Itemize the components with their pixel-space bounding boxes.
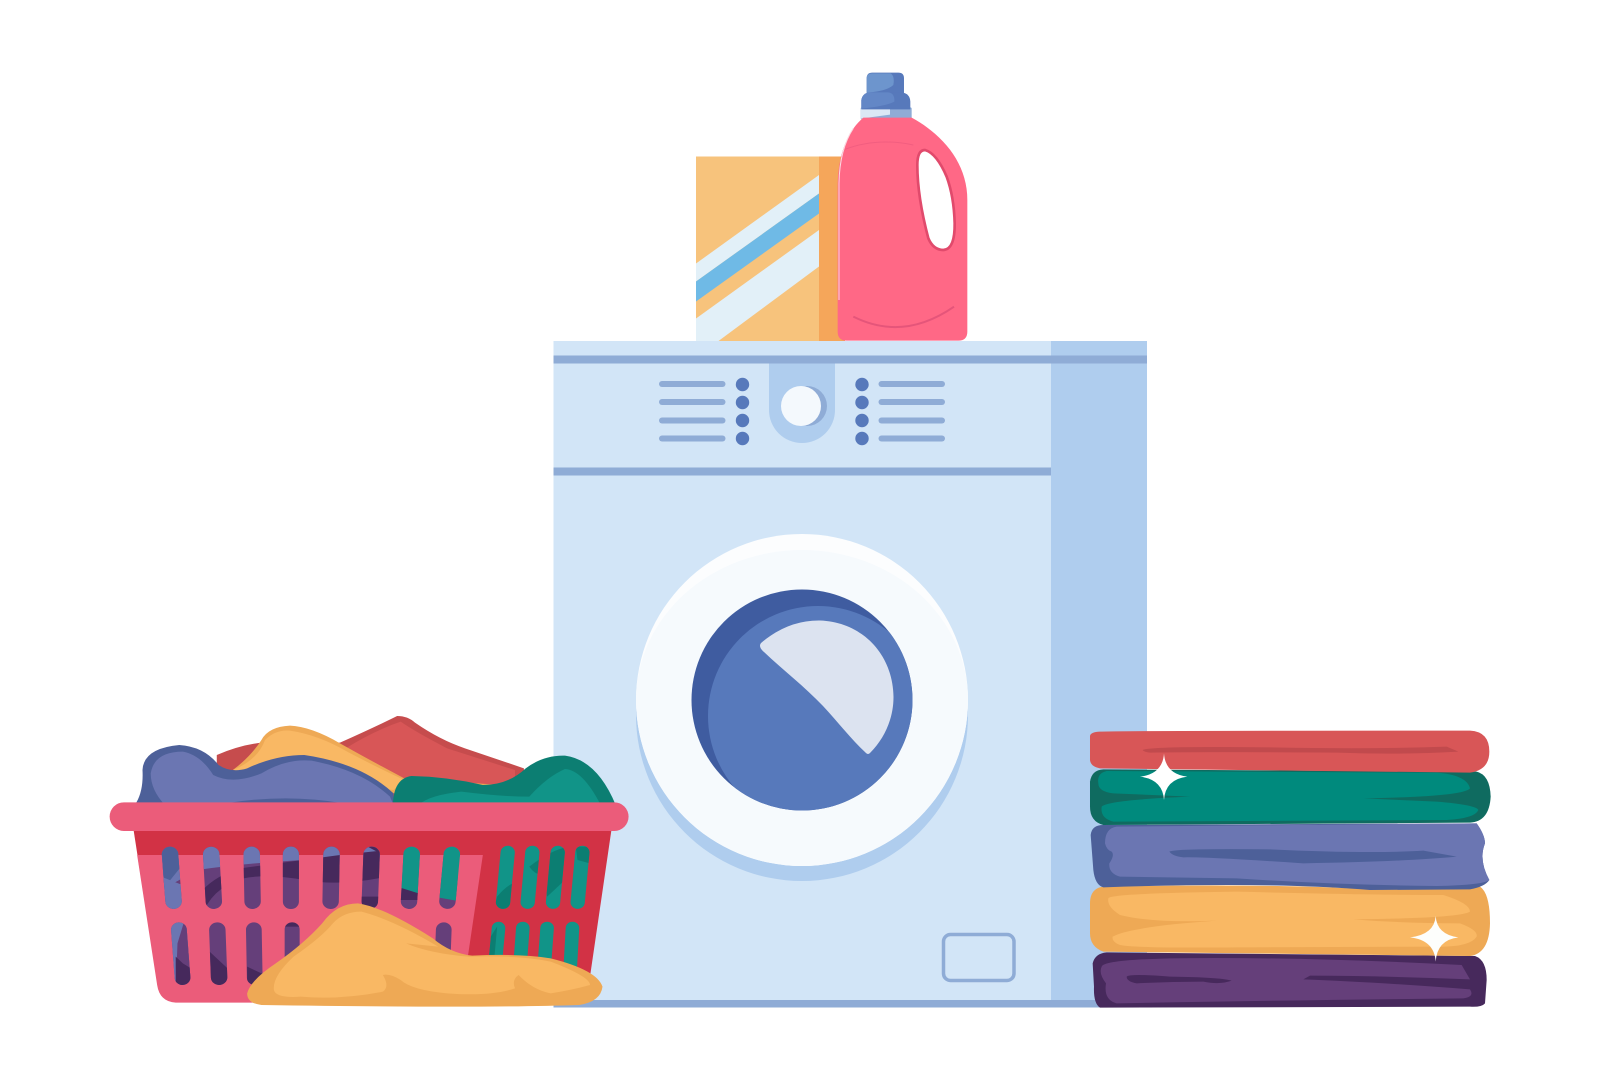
towel: teal: [1090, 769, 1491, 825]
control panel top band: [554, 356, 1147, 364]
bottle cap: [861, 73, 912, 119]
box side: [819, 156, 845, 341]
folded towel stack: [1090, 731, 1491, 1008]
right indicator lines: [878, 381, 945, 442]
box front: [696, 156, 819, 341]
clothes: teal: [393, 756, 616, 805]
yellow clothes pile: [247, 903, 602, 1007]
glass highlight: [760, 620, 894, 754]
box stripes: [696, 175, 819, 341]
door: [636, 534, 968, 881]
clothes: blue: [136, 745, 394, 805]
selector knob: [769, 364, 835, 443]
clothes: red: [217, 716, 524, 805]
left indicator dots: [736, 378, 749, 445]
detergent box: [696, 156, 845, 341]
washing machine: [554, 341, 1147, 1008]
towel: red: [1090, 731, 1489, 773]
towel: yellow: [1090, 885, 1490, 956]
bottle body: [838, 118, 967, 341]
left indicator lines: [659, 381, 726, 442]
door glass: [692, 590, 912, 810]
control panel lower band: [554, 468, 1051, 476]
bottle highlight and contours: [839, 128, 954, 327]
basket body: [134, 830, 611, 1003]
towel: dark purple: [1093, 952, 1487, 1008]
bottle handle: [917, 150, 955, 250]
sparkle: bottom: [1410, 916, 1458, 962]
washer side panel: [1051, 341, 1147, 1001]
sparkle: top: [1140, 753, 1187, 800]
towel: blue: [1091, 823, 1489, 890]
laundry basket: [110, 716, 629, 1007]
right indicator dots: [855, 378, 869, 445]
washer base band: [554, 1000, 1100, 1008]
service hatch: [944, 934, 1014, 980]
slots with clothes behind: [161, 843, 594, 990]
detergent bottle: [838, 73, 967, 341]
clothes: yellow: [233, 726, 501, 793]
illustration: laundry scene: [110, 72, 1491, 1008]
washer body: [554, 341, 1052, 1001]
basket rim: [110, 802, 629, 831]
